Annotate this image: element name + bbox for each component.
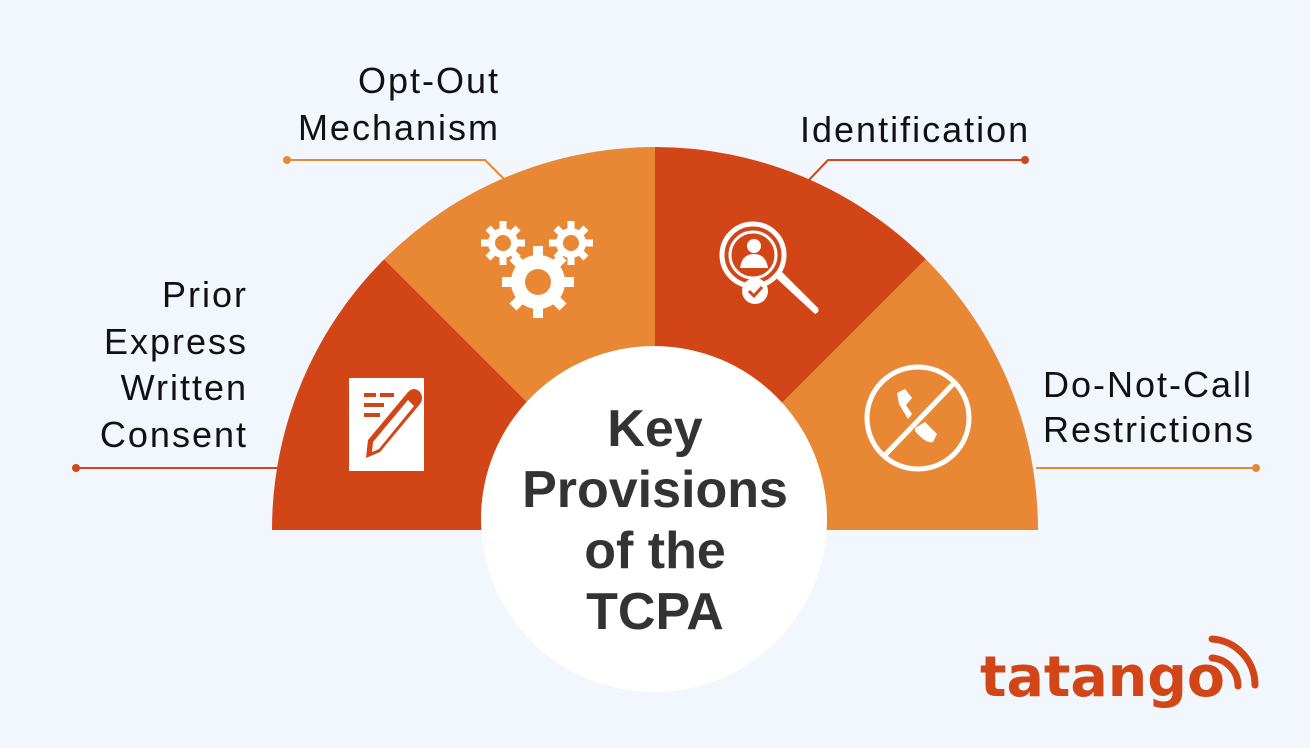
icon: no phone: [867, 367, 969, 469]
label: identification: Identification: [800, 109, 1030, 150]
center title: Key: [607, 400, 703, 458]
label: prior express written consent: Express: [104, 321, 248, 362]
semicircle chart: [272, 147, 1038, 530]
center title: TCPA: [586, 583, 724, 641]
icon: document with pen: [349, 378, 424, 471]
label: opt-out mechanism: Opt-Out: [358, 60, 500, 101]
label: prior express written consent: Written: [121, 367, 248, 408]
segment: prior express written consent: [272, 259, 655, 530]
label: identification: [800, 109, 1030, 180]
label: prior express written consent: Prior: [162, 274, 248, 315]
label: opt-out mechanism: [283, 60, 504, 179]
center title: Provisions: [522, 461, 788, 519]
center title: of the: [584, 522, 726, 580]
segment: do-not-call: [655, 259, 1038, 530]
icon: gears: [481, 221, 593, 318]
center circle: [481, 346, 827, 692]
label: prior express written consent: [72, 274, 278, 472]
label: prior express written consent: Consent: [100, 414, 248, 455]
label: do-not-call restrictions: [1036, 364, 1260, 472]
label: do-not-call restrictions: Do-Not-Call: [1043, 364, 1253, 405]
label: opt-out mechanism: Mechanism: [298, 107, 500, 148]
label: do-not-call restrictions: Restrictions: [1043, 409, 1255, 450]
icon: magnifier with person: [722, 224, 819, 314]
segment: identification: [655, 147, 926, 530]
segment: opt-out mechanism: [384, 147, 655, 530]
logo: tatango: tatango: [980, 645, 1225, 710]
